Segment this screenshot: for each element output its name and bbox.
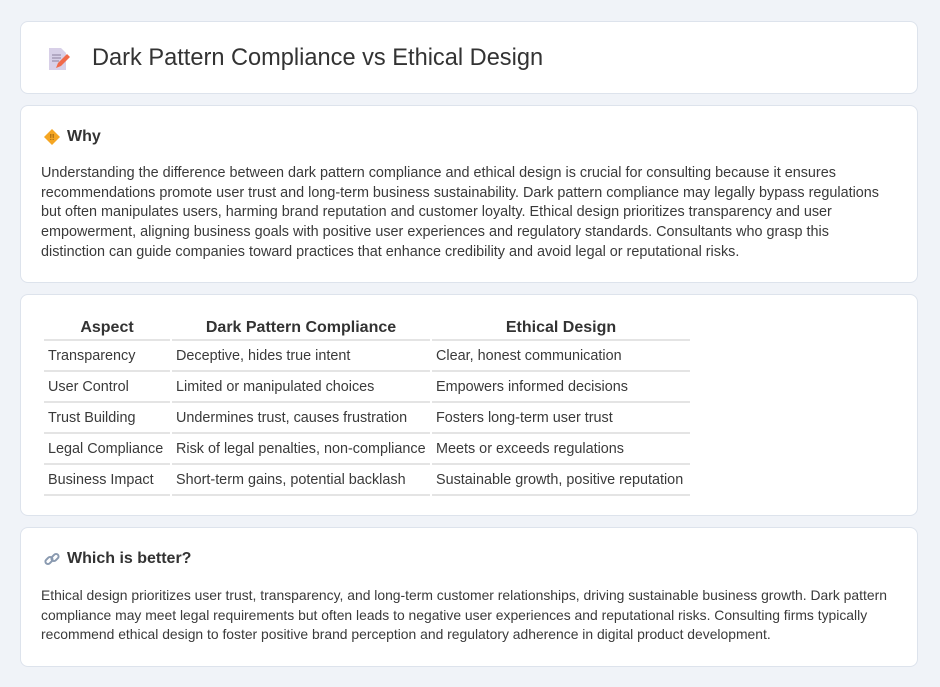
text: why: empowerment, aligning business goals with positive user experiences and regulatory standards. Consultants who grasp this bbox=[41, 224, 829, 240]
table: Legal Compliance bbox=[48, 440, 163, 456]
panel: comparison table bbox=[20, 294, 918, 516]
table: Short-term gains, potential backlash bbox=[176, 472, 406, 488]
table: Aspect bbox=[80, 319, 134, 336]
table bbox=[44, 319, 690, 496]
text: why bbox=[41, 165, 879, 260]
text: which is better: compliance may meet legal requirements but often leads to negative user experiences and reputational risks. Consulting firms typically bbox=[41, 607, 867, 623]
table: Meets or exceeds regulations bbox=[436, 440, 624, 456]
table: Business Impact bbox=[48, 472, 154, 488]
heading: why: Why bbox=[67, 128, 101, 145]
text: which is better: Ethical design prioritizes user trust, transparency, and long-term customer relationships, driving sustainable business growth. Dark pattern bbox=[41, 587, 887, 603]
panel: why bbox=[20, 105, 918, 283]
text: why: Understanding the difference between dark pattern compliance and ethical design is crucial for consulting because it ensures bbox=[41, 165, 836, 181]
table: User Control bbox=[48, 378, 129, 394]
table: Fosters long-term user trust bbox=[436, 410, 613, 426]
table: Clear, honest communication bbox=[436, 348, 622, 364]
title: Dark Pattern Compliance vs Ethical Design bbox=[92, 45, 543, 71]
table: Dark Pattern Compliance bbox=[206, 319, 396, 336]
table: Risk of legal penalties, non-compliance bbox=[176, 440, 426, 456]
icon: diamond bbox=[44, 129, 60, 145]
table: Undermines trust, causes frustration bbox=[176, 410, 407, 426]
table: Sustainable growth, positive reputation bbox=[436, 472, 683, 488]
panel: title bbox=[20, 21, 918, 94]
table: Limited or manipulated choices bbox=[176, 378, 374, 394]
text: which is better bbox=[41, 587, 887, 642]
panel: which is better bbox=[20, 527, 918, 667]
heading: which is better: Which is better? bbox=[67, 550, 191, 567]
icon: link bbox=[44, 553, 60, 565]
table: Ethical Design bbox=[506, 319, 616, 336]
text: which is better: recommend ethical design to foster positive brand perception and regulatory adherence in digital product development. bbox=[41, 626, 771, 642]
icon: diamond: !! bbox=[50, 133, 54, 142]
icon: document with pencil bbox=[49, 48, 70, 70]
table: Deceptive, hides true intent bbox=[176, 348, 350, 364]
text: why: but often manipulates users, harming brand reputation and customer loyalty. Ethical design prioritizes transparency and user bbox=[41, 204, 832, 220]
text: why: distinction can guide companies toward practices that enhance credibility and avoid legal or reputational risks. bbox=[41, 244, 739, 260]
table: Transparency bbox=[48, 348, 135, 364]
table: Trust Building bbox=[48, 410, 135, 426]
text: why: recommendations promote user trust and long-term business sustainability. Dark pattern compliance may legally bypass regulations bbox=[41, 185, 879, 201]
table: Empowers informed decisions bbox=[436, 378, 628, 394]
